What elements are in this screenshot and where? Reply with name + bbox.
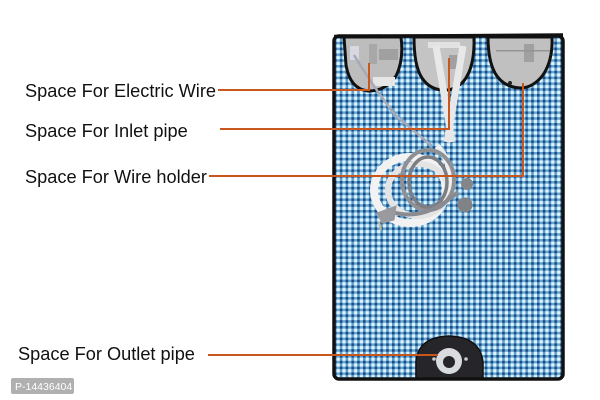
leader: inlet pipe — [220, 58, 449, 129]
label: electric wire: Space For Electric Wire — [25, 81, 216, 101]
label: outlet pipe: Space For Outlet pipe — [18, 344, 195, 364]
panel: right wire holder pocket — [488, 37, 552, 88]
inlet hoses — [436, 46, 463, 142]
panel: centre inlet pocket — [414, 37, 474, 90]
coiled hoses and power cord — [374, 146, 473, 230]
leader: outlet pipe — [208, 354, 438, 356]
watermark badge: P-14436404 — [15, 381, 72, 393]
panel: blue gingham cover — [334, 35, 563, 379]
panel: outlet flap — [416, 336, 483, 378]
leader: wire holder — [209, 83, 523, 176]
outlet pipe ring — [432, 348, 468, 374]
panel: left electric wire pocket — [344, 37, 402, 91]
leader: electric wire — [218, 63, 369, 90]
label: inlet pipe: Space For Inlet pipe — [25, 121, 188, 141]
pocket details — [350, 42, 550, 86]
label: wire holder: Space For Wire holder — [25, 167, 207, 187]
electric wire — [354, 55, 432, 146]
watermark badge — [11, 378, 74, 394]
